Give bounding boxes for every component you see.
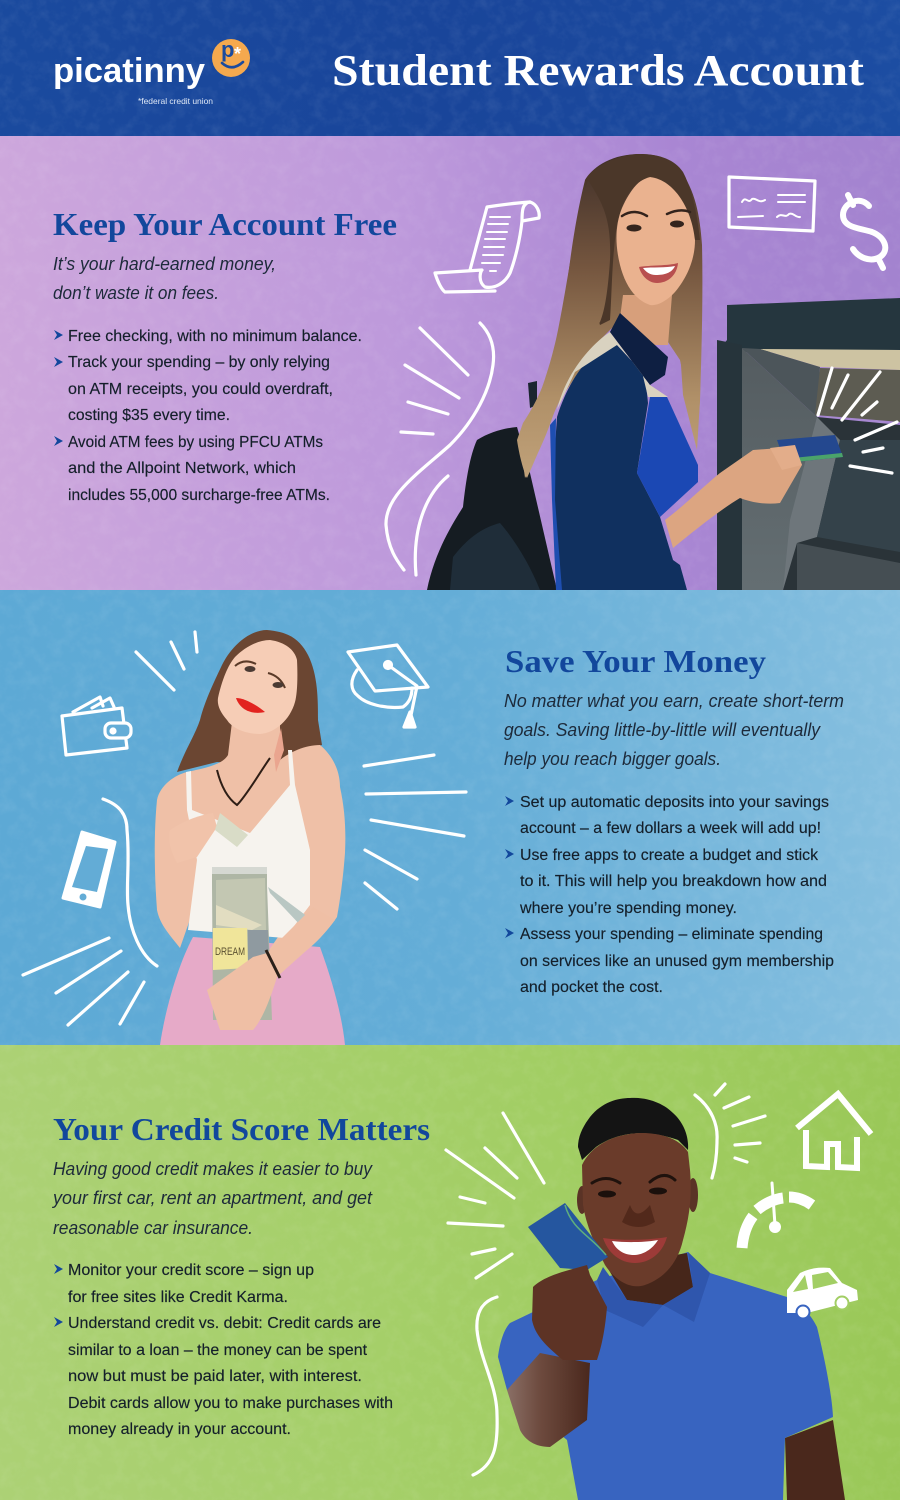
right arm	[785, 1420, 845, 1500]
bullet list: now but must be paid later, with interest.	[68, 1368, 362, 1385]
intro text: It’s your hard-earned money,	[53, 253, 276, 274]
white top	[186, 750, 310, 938]
photo: woman at ATM	[427, 154, 843, 590]
blue dress	[637, 397, 698, 517]
skirt	[160, 937, 345, 1045]
icon: house	[797, 1094, 871, 1168]
bullet list: Avoid ATM fees by using PFCU ATMs	[68, 434, 323, 451]
bullet list: Track your spending – by only relying	[68, 354, 330, 371]
polo shirt	[498, 1252, 833, 1500]
bullet list: and pocket the cost.	[520, 979, 663, 996]
jar	[212, 867, 272, 1020]
panel: keep your account free	[0, 136, 900, 590]
bullet list: Debit cards allow you to make purchases with	[68, 1395, 393, 1412]
heading: Save Your Money	[505, 643, 766, 679]
bullet list: Assess your spending – eliminate spending	[520, 926, 823, 943]
icon: gauge	[742, 1183, 812, 1248]
backpack	[427, 381, 557, 590]
bullet list: account – a few dollars a week will add up!	[520, 820, 821, 837]
forearm and jar hand	[207, 907, 335, 1030]
doodle: bursts	[446, 1084, 765, 1475]
hair	[177, 630, 322, 772]
photo: ATM machine	[717, 298, 900, 590]
title: Student Rewards Account	[332, 46, 864, 95]
icon: car	[787, 1268, 858, 1318]
bullet list: includes 55,000 surcharge-free ATMs.	[68, 487, 330, 504]
face	[582, 1133, 691, 1286]
bullet list: to it. This will help you breakdown how and	[520, 873, 827, 890]
smile	[603, 1237, 667, 1263]
bullet list	[505, 794, 834, 996]
intro text: don’t waste it on fees.	[53, 282, 219, 303]
hair	[578, 1098, 688, 1160]
icon: dollar sign	[843, 195, 885, 268]
collar	[597, 1267, 663, 1327]
doodle: ATM sparks	[818, 368, 897, 473]
heading: Keep Your Account Free	[53, 206, 397, 242]
intro text: reasonable car insurance.	[53, 1217, 253, 1238]
heading: Your Credit Score Matters	[53, 1111, 430, 1147]
bullet list: similar to a loan – the money can be spent	[68, 1342, 368, 1359]
hand holding bill	[169, 813, 217, 863]
bullet list: costing $35 every time.	[68, 407, 230, 424]
icon: smartphone	[63, 832, 115, 907]
doodle: burst and swirl	[386, 323, 494, 575]
panel: save your money	[0, 590, 900, 1045]
bullet list: Use free apps to create a budget and stick	[520, 847, 819, 864]
earring	[274, 728, 284, 772]
arm and hand	[665, 447, 802, 548]
logo: picatinny: p	[221, 37, 234, 62]
ten dollar bill	[215, 813, 248, 847]
photo: woman with savings jar	[155, 630, 345, 1045]
eyes and brows	[592, 1175, 675, 1183]
bullet list: and the Allpoint Network, which	[68, 460, 296, 477]
hand	[532, 1265, 607, 1360]
bullet list: money already in your account.	[68, 1421, 291, 1438]
header band	[0, 0, 900, 136]
icon: check	[729, 177, 815, 231]
necklace	[217, 758, 270, 805]
intro text: goals. Saving little-by-little will eventually	[504, 719, 822, 740]
bullet list	[54, 328, 362, 504]
intro text	[53, 253, 276, 303]
bullet list: for free sites like Credit Karma.	[68, 1289, 288, 1306]
torso skin	[155, 722, 345, 977]
sticker	[213, 928, 248, 970]
logo: picatinny: picatinny	[53, 52, 205, 90]
hair	[517, 154, 702, 478]
forearm	[507, 1353, 590, 1447]
face	[616, 177, 695, 305]
cardigan	[552, 345, 687, 590]
intro text	[51, 1158, 374, 1238]
bullet list: on ATM receipts, you could overdraft,	[68, 381, 333, 398]
smile	[639, 263, 678, 283]
intro text: Having good credit makes it easier to buy	[53, 1158, 374, 1179]
cream yoke	[557, 332, 668, 410]
sticker: DREAM	[215, 946, 245, 958]
logo: picatinny: *	[234, 44, 241, 64]
bullet list	[54, 1262, 393, 1438]
doodle: bursts	[23, 632, 466, 1025]
neck	[607, 1253, 693, 1305]
bullet list: Understand credit vs. debit: Credit cards are	[68, 1315, 381, 1332]
neck	[620, 295, 672, 345]
credit card	[777, 435, 843, 463]
icon: graduation cap	[348, 645, 428, 727]
intro text: your first car, rent an apartment, and get	[51, 1187, 373, 1208]
bullet list: Set up automatic deposits into your savings	[520, 794, 829, 811]
icon: wallet	[62, 697, 131, 755]
bullet list: on services like an unused gym membership	[520, 953, 834, 970]
bullet list: Free checking, with no minimum balance.	[68, 328, 362, 345]
bullet list: Monitor your credit score – sign up	[68, 1262, 314, 1279]
logo: picatinny	[53, 37, 250, 106]
logo: picatinny: *federal credit union	[138, 96, 213, 106]
panel: your credit score matters	[0, 1045, 900, 1500]
photo: man holding credit card	[498, 1098, 845, 1500]
intro text: No matter what you earn, create short-term	[504, 690, 844, 711]
intro text: help you reach bigger goals.	[504, 748, 721, 769]
eyes and brows	[622, 210, 690, 216]
intro text	[504, 690, 844, 769]
bullet list: where you’re spending money.	[519, 900, 737, 917]
ears	[577, 1186, 587, 1214]
credit card	[528, 1203, 608, 1270]
face	[218, 640, 297, 734]
icon: receipt	[435, 202, 539, 292]
